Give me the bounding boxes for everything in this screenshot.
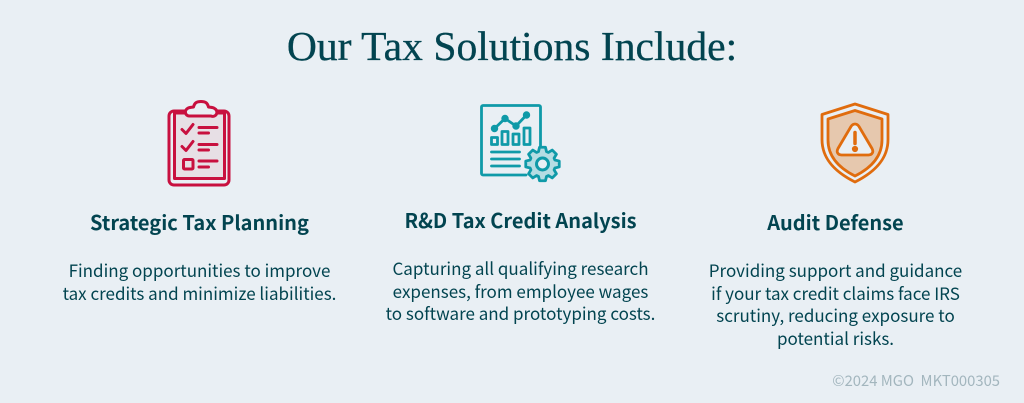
icon: clipboard checklist [168, 100, 230, 186]
text: strategic tax planning description [63, 257, 336, 305]
gear [526, 147, 559, 181]
text: audit defense description: Providing support and guidance [709, 257, 962, 282]
text: R&D description: to software and prototyping costs. [386, 300, 655, 325]
text: audit defense description [709, 257, 962, 350]
heading: Audit Defense: Audit Defense [767, 207, 904, 236]
text: R&D description: Capturing all qualifying research [392, 255, 649, 280]
icon: report with gear [480, 104, 561, 182]
text: R&D description [386, 255, 655, 325]
text: audit defense description: if your tax credit claims face IRS [711, 280, 960, 305]
text: audit defense description: potential risks. [777, 325, 894, 350]
text: R&D description: expenses, from employee wages [393, 278, 648, 303]
icon: shield with warning [820, 102, 890, 184]
text: audit defense description: scrutiny, reducing exposure to [716, 302, 955, 327]
heading: R&D Tax Credit Analysis: R&D Tax Credit Analysis [404, 205, 637, 234]
heading: Strategic Tax Planning: Strategic Tax Planning [90, 207, 309, 236]
text: strategic tax planning description: tax credits and minimize liabilities. [63, 280, 336, 305]
copyright footer: ©2024 MGO MKT000305 [832, 370, 1000, 391]
text: strategic tax planning description: Finding opportunities to improve [69, 257, 330, 282]
title: Our Tax Solutions Include: [287, 23, 737, 69]
